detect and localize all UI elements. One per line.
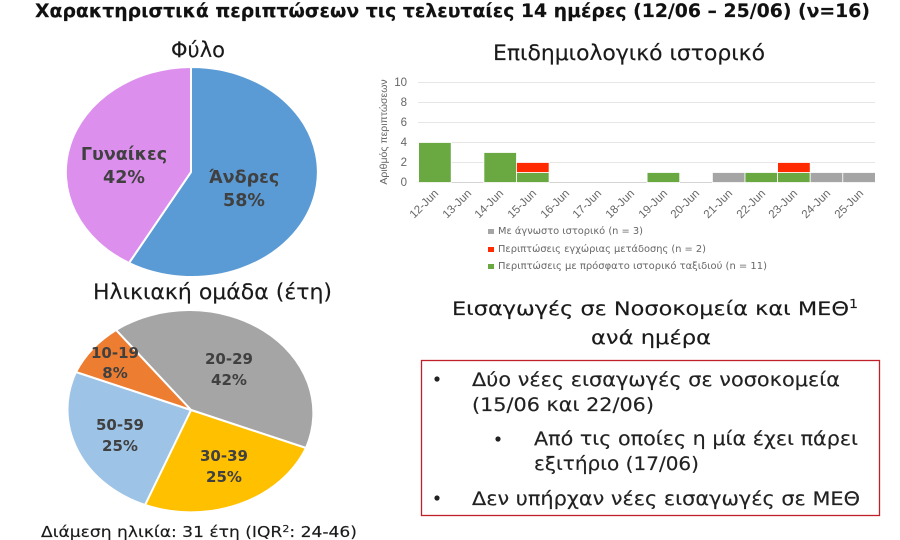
pie slice: men <box>129 67 318 277</box>
y axis ticks: 10 <box>394 77 407 89</box>
x axis date labels <box>408 188 866 221</box>
x axis date labels: 23-Jun <box>767 188 800 221</box>
heading: admissions <box>452 297 858 349</box>
pie slice: 50-59 <box>67 372 191 505</box>
heading: admissions: 1 <box>849 297 858 311</box>
callout text: Δύο νέες εισαγωγές σε νοσοκομεία <box>472 369 840 391</box>
x axis date labels: 19-Jun <box>637 188 670 221</box>
label: women: 42% <box>103 168 145 188</box>
callout text: Από τις οποίες η μία έχει πάρει <box>534 428 858 450</box>
label: 20-29: 20-29 <box>205 350 253 368</box>
heading: gender: Φύλο <box>171 38 225 62</box>
label: men: 58% <box>223 191 265 211</box>
label: 30-39 <box>200 447 248 486</box>
label: 10-19: 8% <box>102 364 128 382</box>
y axis ticks: 0 <box>401 177 407 189</box>
heading: admissions: Εισαγωγές σε Νοσοκομεία και ΜΕΘ <box>452 298 788 320</box>
x axis date labels: 24-Jun <box>800 188 833 221</box>
y axis ticks: 4 <box>401 137 408 149</box>
x axis date labels: 25-Jun <box>833 188 866 221</box>
bars <box>419 142 875 182</box>
y axis ticks: 2 <box>401 157 407 169</box>
y axis ticks: 8 <box>401 97 407 109</box>
callout text: (15/06 και 22/06) <box>472 394 654 416</box>
panel: hospital and ICU admissions <box>422 297 880 516</box>
label: 50-59: 25% <box>102 437 138 455</box>
x axis date labels: 15-Jun <box>506 188 539 221</box>
pie slice: 20-29 <box>116 310 313 448</box>
callout text <box>434 369 860 510</box>
label: men <box>209 168 279 211</box>
label: 50-59: 50-59 <box>96 416 144 434</box>
label: women <box>81 145 167 188</box>
label: 50-59 <box>96 416 144 455</box>
label: 20-29: 42% <box>211 371 247 389</box>
x axis date labels: 12-Jun <box>408 188 441 221</box>
bar chart <box>378 77 875 272</box>
legend: Περιπτώσεις εγχώριας μετάδοσης (n = 2) <box>498 244 706 255</box>
legend: Περιπτώσεις με πρόσφατο ιστορικό ταξιδιού (n = 11) <box>498 261 767 272</box>
label: 30-39: 30-39 <box>200 447 248 465</box>
x axis date labels: 22-Jun <box>735 188 768 221</box>
x axis date labels: 13-Jun <box>441 188 474 221</box>
heading: epidemiological history: Επιδημιολογικό ιστορικό <box>493 41 765 65</box>
label: 10-19: 10-19 <box>91 344 139 362</box>
y axis ticks <box>394 77 408 189</box>
y axis ticks: 6 <box>401 117 407 129</box>
pie slice: 10-19 <box>76 330 191 410</box>
x axis date labels: 14-Jun <box>473 188 506 221</box>
label: women: Γυναίκες <box>81 145 167 165</box>
callout text: Δεν υπήρχαν νέες εισαγωγές σε ΜΕΘ <box>472 488 860 510</box>
heading: age group: Ηλικιακή ομάδα (έτη) <box>93 280 332 304</box>
heading: admissions: ανά ημέρα <box>591 327 711 349</box>
legend: Με άγνωστο ιστορικό (n = 3) <box>498 226 643 237</box>
label: 20-29 <box>205 350 253 389</box>
callout text: εξιτήριο (17/06) <box>534 453 699 475</box>
label: 30-39: 25% <box>206 468 242 486</box>
label: 10-19 <box>91 344 139 382</box>
median age note: 2 <box>282 524 289 535</box>
legend <box>488 226 767 272</box>
x axis date labels: 20-Jun <box>669 188 702 221</box>
y axis title: Αριθμός περιπτώσεων <box>378 79 390 185</box>
pie slice: women <box>66 67 191 263</box>
label: men: Άνδρες <box>209 168 279 188</box>
title: Χαρακτηριστικά περιπτώσεων τις τελευταίες 14 ημέρες (12/06 – 25/06) (ν=16) <box>35 0 870 22</box>
callout box <box>422 360 880 516</box>
x axis date labels: 17-Jun <box>571 188 604 221</box>
pie slice: 30-39 <box>145 410 306 512</box>
panel: age group pie <box>41 280 357 540</box>
x axis date labels: 18-Jun <box>604 188 637 221</box>
panel: epidemiological history <box>378 41 875 272</box>
panel: gender pie <box>66 38 318 277</box>
x axis date labels: 16-Jun <box>539 188 572 221</box>
x axis date labels: 21-Jun <box>702 188 735 221</box>
